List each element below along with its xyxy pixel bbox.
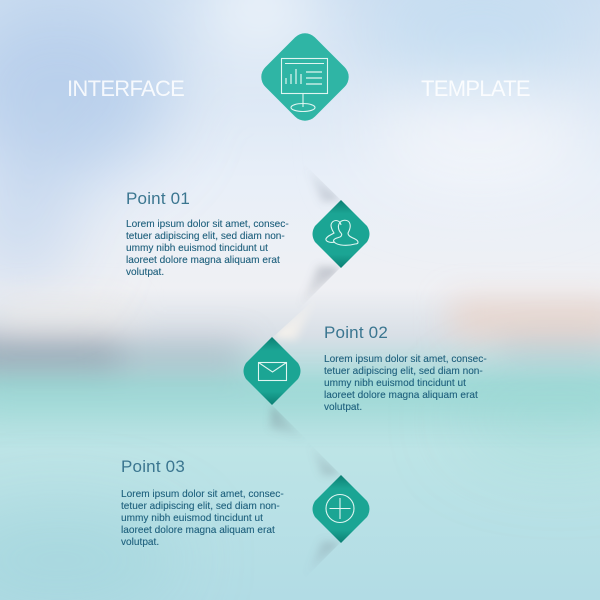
body text: point 02: Lorem ipsum dolor sit amet, consec- [324,354,487,365]
body text: point 03: Lorem ipsum dolor sit amet, consec- [121,489,284,500]
icon: people on diamond [312,200,370,268]
panel: point 03 text [121,457,284,548]
body text: point 02: volutpat. [324,402,362,413]
icon: plus in circle on diamond [312,475,370,543]
icon: envelope on diamond [244,337,370,515]
body text: point 03: ummy nibh euismod tincidunt ut [121,513,263,524]
heading: point 01: Point 01 [126,189,190,208]
body text: point 03: volutpat. [121,537,159,548]
body text: point 03 [121,489,284,548]
body text: point 01: ummy nibh euismod tincidunt ut [126,243,268,254]
panel: point 02 text [324,323,487,515]
body text: point 02: laoreet dolore magna aliquam erat [324,390,478,401]
body text: point 03: laoreet dolore magna aliquam erat [121,525,275,536]
body text: point 02 [324,354,487,515]
fold shadows [270,166,341,577]
main icon: presentation screen on teal diamond [261,33,349,121]
body text: point 01: volutpat. [126,267,164,278]
body text: point 01: tetuer adipiscing elit, sed diam non- [126,231,285,242]
heading right: TEMPLATE: TEMPLATE [421,76,530,101]
heading left: INTERFACE: INTERFACE [67,76,184,101]
body text: point 03: tetuer adipiscing elit, sed diam non- [121,501,280,512]
body text: point 02: ummy nibh euismod tincidunt ut [324,378,466,389]
body text: point 01: Lorem ipsum dolor sit amet, consec- [126,219,289,230]
heading: point 03: Point 03 [121,457,185,476]
heading: point 02: Point 02 [324,323,388,342]
body text: point 01: laoreet dolore magna aliquam erat [126,255,280,266]
body text: point 02: tetuer adipiscing elit, sed diam non- [324,366,483,377]
body text: point 01 [126,219,289,278]
panel: point 01 text [126,189,289,278]
